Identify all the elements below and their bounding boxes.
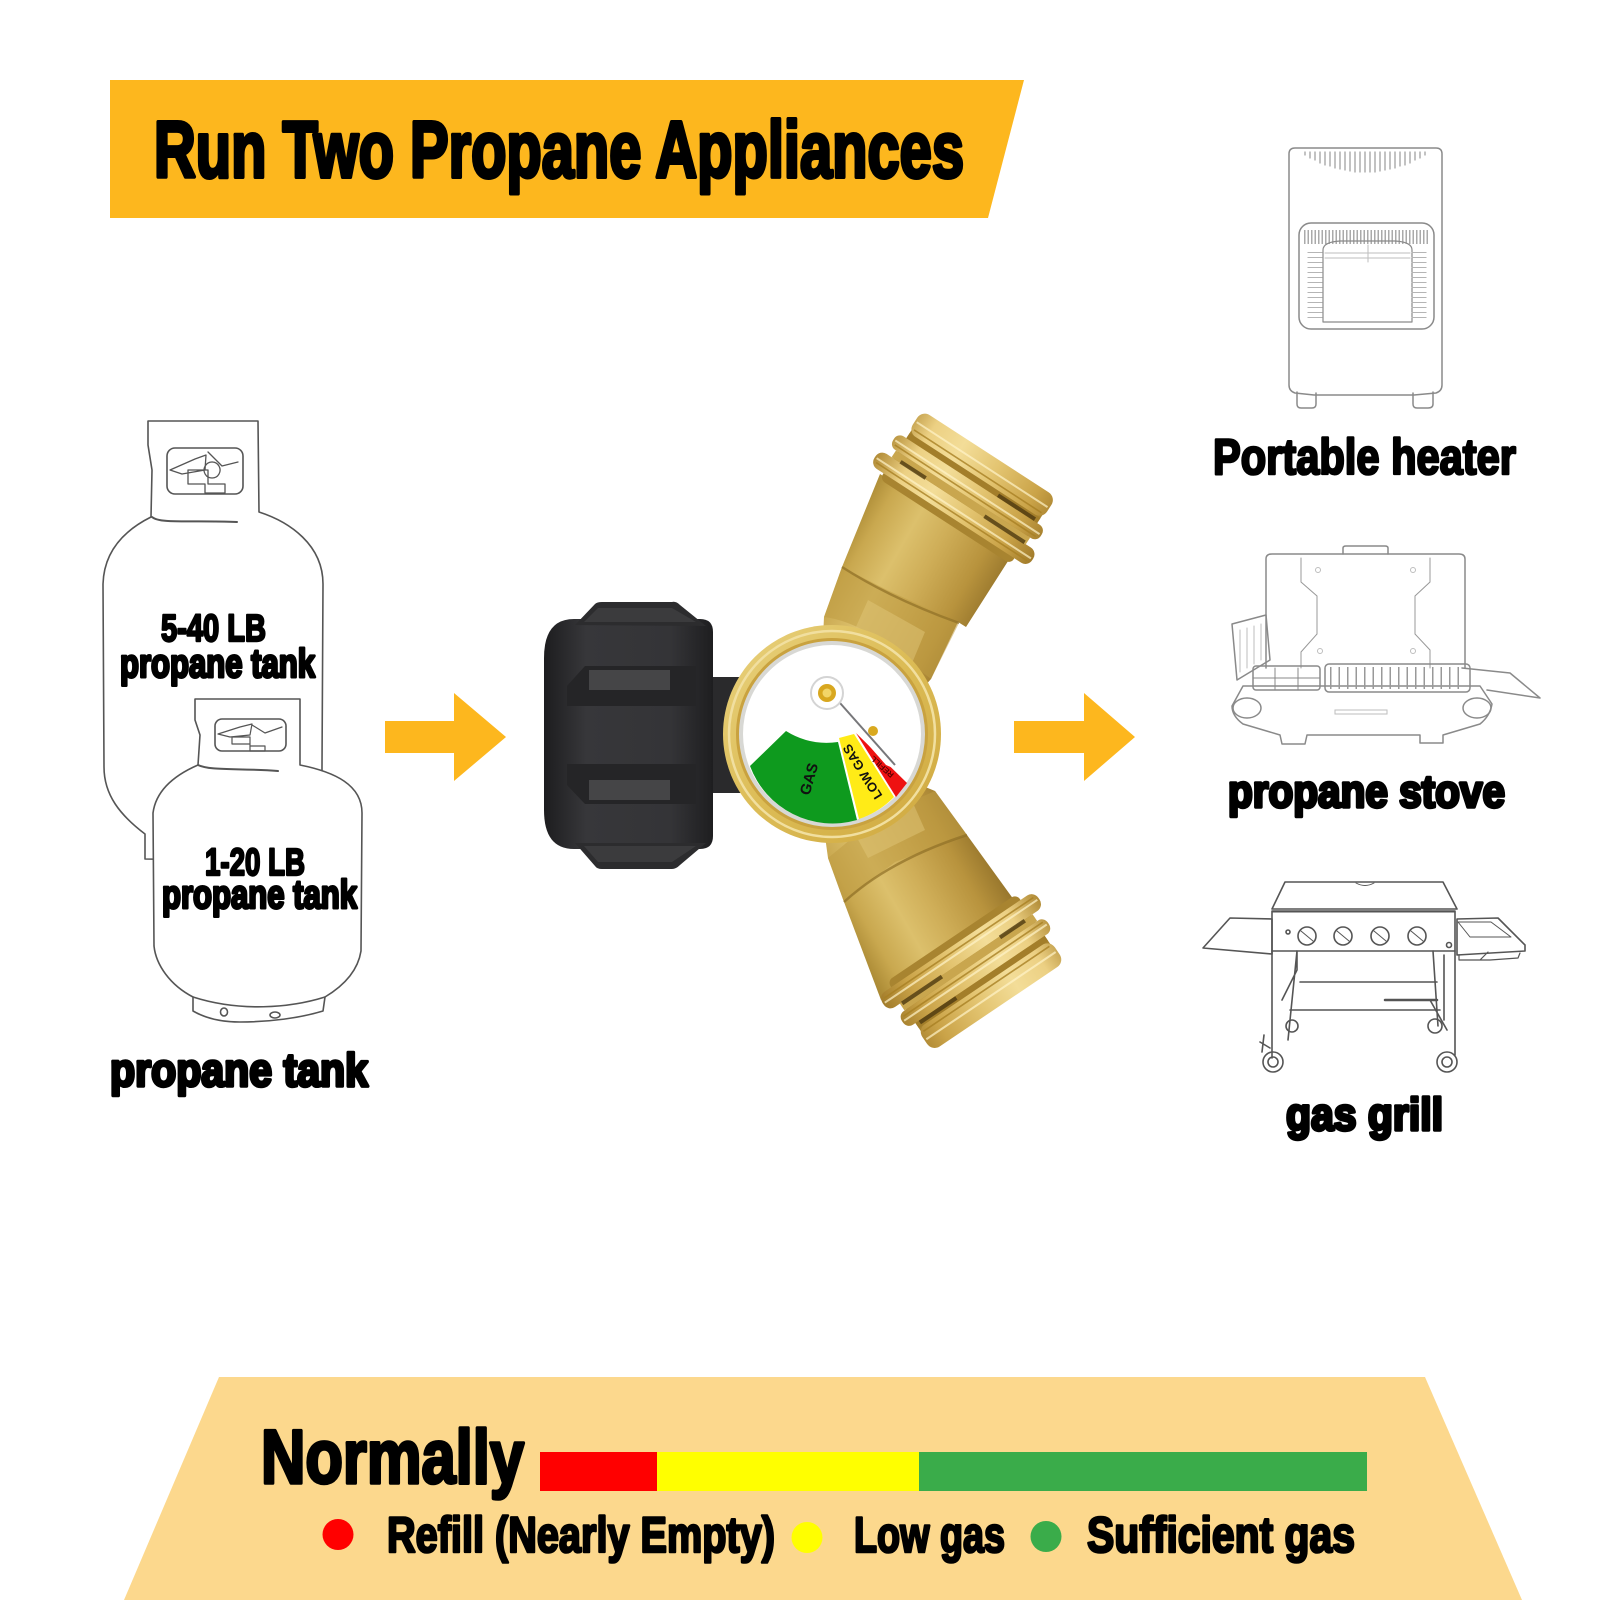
legend: sufficient gas: Sufficient gas [1087,1507,1355,1563]
icon: portable heater [1289,148,1442,408]
gauge zone: gas [750,731,857,823]
black acme nut [544,602,713,869]
legend: low gas [792,1507,1005,1563]
black connector neck [706,677,746,793]
arrow: adapter to appliances [1014,693,1135,781]
legend: low gas: Low gas [854,1507,1005,1563]
label: portable heater: Portable heater [1213,429,1516,485]
gauge hub [811,677,843,709]
lower brass arm [820,760,1076,1059]
label: propane tank: propane tank [110,1044,368,1096]
gauge dial [723,625,941,843]
icon: gas grill [1203,882,1525,1072]
icon: propane stove [1232,546,1540,744]
legend: sufficient gas [1030,1507,1355,1563]
gauge label: REFILL: REFILL [869,754,896,779]
tank label: 1-20 LB: 1-20 LB [205,842,305,884]
gauge zone: low gas [839,734,894,819]
title banner [110,80,1024,218]
gauge scale bar [540,1452,1367,1491]
icon: large propane tank [103,421,323,860]
label: gas grill: gas grill [1286,1089,1443,1140]
icon: brass Y adapter [544,403,1076,1059]
arrow: tank to adapter [385,693,506,781]
tank label: propane tank (large): propane tank [120,642,316,686]
panel: gauge legend [124,1377,1522,1600]
heading: Normally: Normally [261,1415,524,1500]
gauge needle [835,703,895,768]
icon: small propane tank [153,699,362,1022]
tank label: 5-40 LB: 5-40 LB [161,608,266,650]
legend: refill: Refill (Nearly Empty) [387,1507,775,1563]
tank label: propane tank (small): propane tank [162,873,358,917]
title text: Run Two Propane Appliances [154,105,964,194]
gauge pin [868,726,878,736]
gauge label: LOW GAS: LOW GAS [839,741,885,802]
label: propane stove: propane stove [1228,766,1505,817]
gauge label: GAS: GAS [797,761,822,797]
gauge zone: refill [856,733,907,797]
upper brass arm [820,403,1068,760]
